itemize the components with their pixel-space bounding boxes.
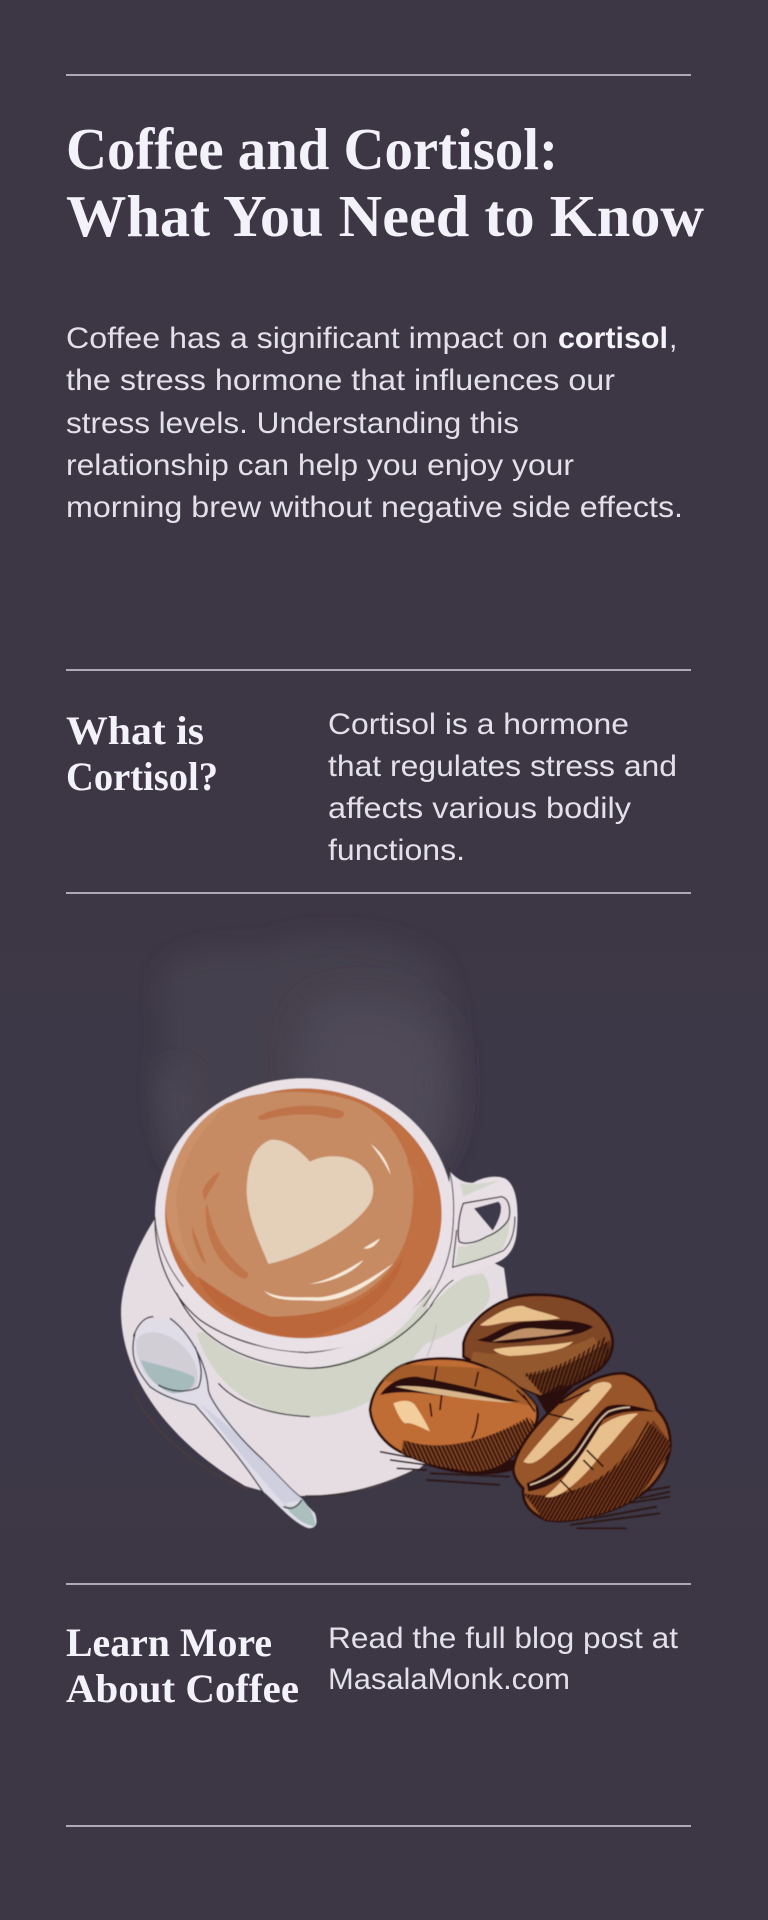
top divider	[66, 74, 691, 76]
bottom divider	[66, 1825, 691, 1827]
cortisol description: functions.	[328, 834, 465, 867]
bean: right	[513, 1373, 675, 1523]
intro paragraph: cortisol	[558, 322, 668, 355]
coffee highlights	[264, 1144, 393, 1301]
title: Coffee and Cortisol:	[66, 116, 558, 182]
divider below cortisol section	[66, 892, 691, 894]
heading: what is cortisol: What is	[66, 708, 204, 753]
intro paragraph: morning brew without negative side effects.	[66, 491, 683, 524]
cup body and shadow	[155, 1098, 490, 1417]
cup rim and coffee	[155, 1078, 454, 1352]
divider above cortisol section	[66, 669, 691, 671]
blog link text: Read the full blog post at	[328, 1622, 679, 1655]
blog link text	[328, 1622, 679, 1696]
steam	[160, 936, 455, 1170]
cortisol description: Cortisol is a hormone	[328, 708, 629, 741]
bean: left	[370, 1358, 542, 1477]
spoon	[133, 1317, 317, 1528]
infographic page	[66, 74, 704, 1827]
intro paragraph: ,	[669, 322, 677, 355]
bean: top	[463, 1295, 613, 1413]
intro paragraph: Coffee has a significant impact on	[66, 322, 548, 355]
illustration: coffee cup, spoon and beans	[121, 936, 675, 1528]
heading: what is cortisol: Cortisol?	[66, 754, 218, 799]
cortisol description: affects various bodily	[328, 792, 631, 825]
divider above learn more section	[66, 1583, 691, 1585]
heading: learn more about coffee	[66, 1620, 299, 1711]
cortisol description	[328, 708, 677, 867]
cup handle	[427, 1172, 518, 1310]
heading: learn more about coffee: Learn More	[66, 1620, 272, 1665]
blog link text: MasalaMonk.com	[328, 1663, 570, 1696]
title: What You Need to Know	[66, 183, 704, 249]
title	[66, 116, 704, 249]
heading: learn more about coffee: About Coffee	[66, 1666, 299, 1711]
coffee beans	[370, 1295, 675, 1528]
intro paragraph	[66, 322, 683, 524]
bean shadows	[380, 1452, 670, 1528]
intro paragraph: stress levels. Understanding this	[66, 407, 519, 440]
heading: what is cortisol	[66, 708, 218, 799]
coffee surface	[165, 1088, 442, 1338]
saucer	[121, 1220, 520, 1496]
latte art heart	[247, 1140, 373, 1264]
intro paragraph: relationship can help you enjoy your	[66, 449, 574, 482]
cortisol description: that regulates stress and	[328, 750, 677, 783]
intro paragraph: the stress hormone that influences our	[66, 364, 615, 397]
